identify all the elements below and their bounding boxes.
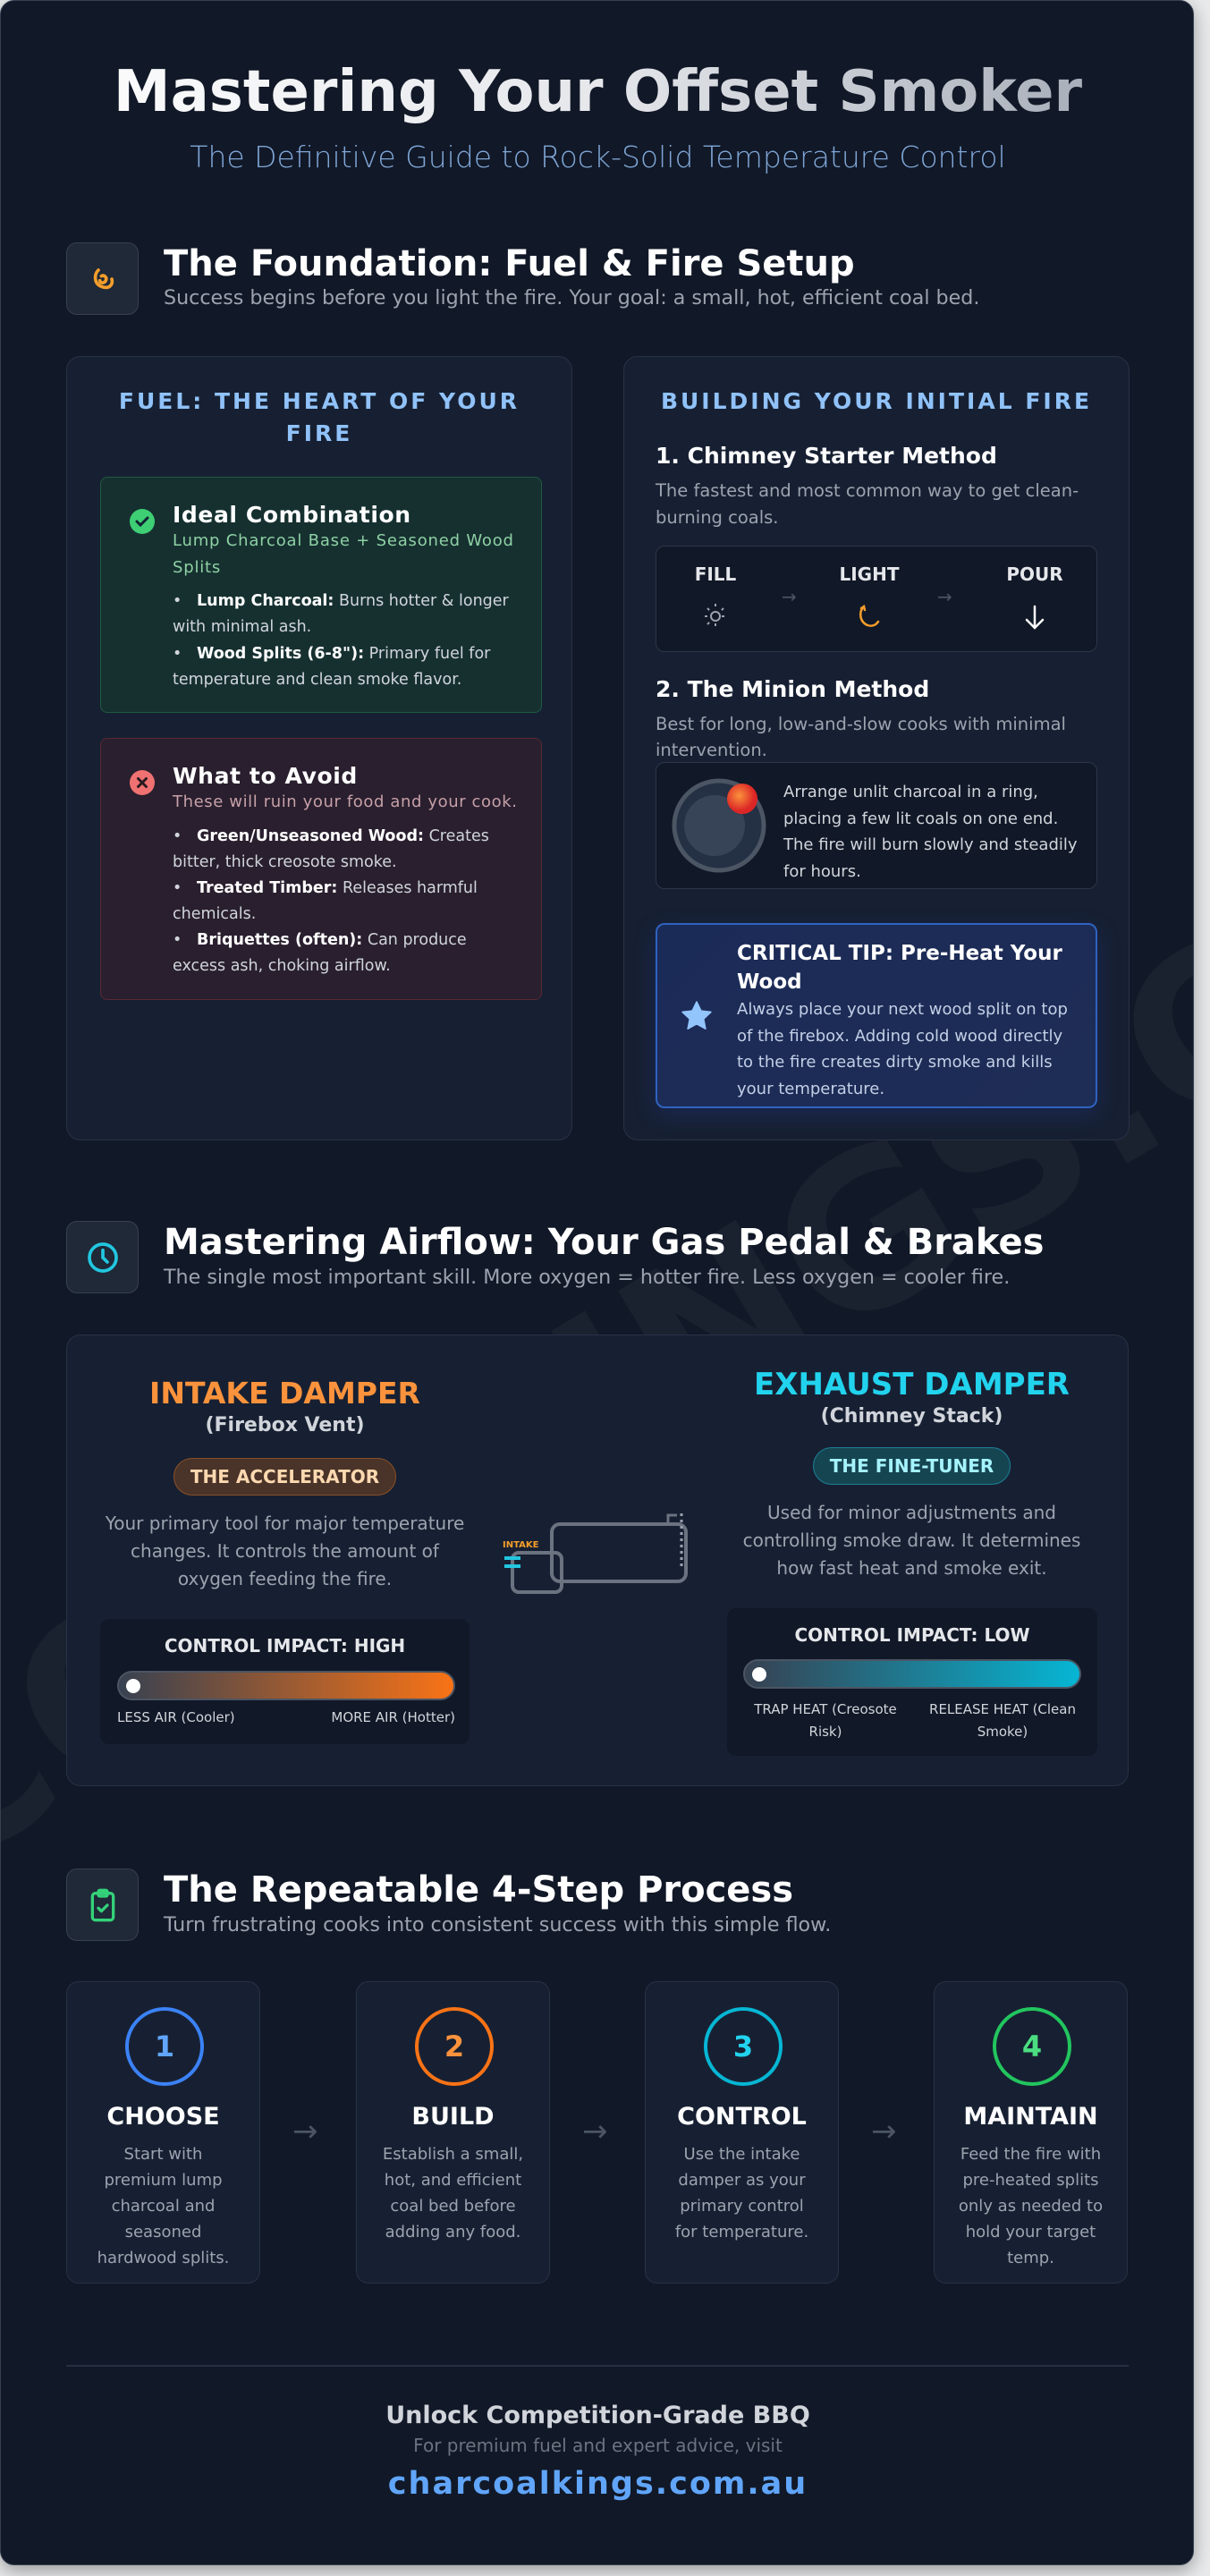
intake damper column: changes. It controls the amount of xyxy=(131,1540,439,1562)
step 2 xyxy=(356,1981,550,2284)
section heading: foundation: The Foundation: Fuel & Fire Setup xyxy=(164,243,855,284)
exhaust damper column: how fast heat and smoke exit. xyxy=(776,1557,1047,1579)
steps box: fill light pour xyxy=(656,546,1097,652)
subtitle: The Definitive Guide to Rock-Solid Temperature Control xyxy=(190,140,1006,174)
control impact low xyxy=(727,1608,1097,1756)
control impact low: CONTROL IMPACT: LOW xyxy=(794,1624,1030,1646)
exhaust damper column: (Chimney Stack) xyxy=(821,1405,1003,1428)
arrow 3: → xyxy=(871,2114,896,2149)
pill: accelerator xyxy=(173,1458,396,1496)
control impact low: Risk) xyxy=(809,1724,842,1740)
step 4: temp. xyxy=(1007,2249,1054,2267)
step 2: adding any food. xyxy=(385,2223,520,2241)
callout: critical tip: Always place your next wood split on top xyxy=(737,1000,1068,1019)
section subtitle: airflow: The single most important skill. More oxygen = hotter fire. Less oxygen = cooler fire. xyxy=(164,1266,1010,1289)
diagram: smoker xyxy=(503,1513,688,1594)
step 2: 2 xyxy=(444,2029,464,2063)
step 2: Establish a small, xyxy=(383,2145,523,2164)
icon: light xyxy=(859,605,880,627)
box: ideal combination: with minimal ash. xyxy=(173,618,311,636)
step 1: Start with xyxy=(124,2145,202,2164)
intake damper column: Your primary tool for major temperature xyxy=(106,1513,464,1534)
exhaust damper column xyxy=(743,1367,1080,1579)
box: what to avoid: • Green/Unseasoned Wood: Creates xyxy=(173,827,489,845)
icon: check xyxy=(130,509,155,534)
footer: For premium fuel and expert advice, visit xyxy=(413,2435,783,2456)
minion box: for hours. xyxy=(783,862,861,880)
callout: critical tip: Wood xyxy=(737,970,802,994)
minion box: Arrange unlit charcoal in a ring, xyxy=(783,783,1038,801)
arrow 2: → xyxy=(582,2114,608,2149)
control impact high xyxy=(100,1619,470,1744)
step 4: 4 xyxy=(1022,2029,1042,2063)
icon: clipboard xyxy=(66,1868,139,1941)
panel: building initial fire xyxy=(623,356,1130,1140)
control impact high: LESS AIR (Cooler) xyxy=(117,1709,235,1725)
box: ideal combination: Ideal Combination xyxy=(173,502,411,528)
intake damper column: INTAKE DAMPER xyxy=(149,1376,420,1411)
arrow 1: → xyxy=(292,2114,318,2149)
box: what to avoid: What to Avoid xyxy=(173,763,358,789)
step 4: hold your target xyxy=(966,2223,1096,2241)
box: ideal combination: temperature and clean smoke flavor. xyxy=(173,671,461,689)
step 3: CONTROL xyxy=(677,2103,807,2131)
step 4: pre-heated splits xyxy=(962,2171,1099,2190)
callout: critical tip: of the firebox. Adding cold wood directly xyxy=(737,1027,1062,1045)
steps box: fill light pour: → xyxy=(782,586,797,607)
icon: fill xyxy=(705,604,724,626)
exhaust damper column: EXHAUST DAMPER xyxy=(754,1367,1070,1402)
gauge high xyxy=(117,1671,455,1700)
step 3: primary control xyxy=(680,2197,804,2216)
section heading: airflow: Mastering Airflow: Your Gas Pedal & Brakes xyxy=(164,1222,1044,1263)
intake damper column: (Firebox Vent) xyxy=(205,1414,365,1436)
method 1 description: burning coals. xyxy=(656,507,778,528)
minion box: The fire will burn slowly and steadily xyxy=(783,835,1078,854)
icon: star xyxy=(681,1001,712,1030)
control impact low: TRAP HEAT (Creosote xyxy=(754,1701,897,1717)
box: what to avoid: • Treated Timber: Releases harmful xyxy=(173,879,478,897)
icon: minion ring xyxy=(673,778,766,873)
steps box: fill light pour: → xyxy=(937,586,952,607)
footer: Unlock Competition-Grade BBQ xyxy=(385,2402,810,2429)
control impact low: RELEASE HEAT (Clean xyxy=(929,1701,1076,1717)
callout: critical tip: your temperature. xyxy=(737,1079,884,1098)
icon: flame xyxy=(66,242,139,315)
diagram: smoker: INTAKE xyxy=(503,1540,539,1550)
step 1: CHOOSE xyxy=(106,2103,220,2131)
panel heading: fuel xyxy=(119,388,520,446)
intake damper column xyxy=(106,1376,464,1589)
step 3: for temperature. xyxy=(675,2223,808,2241)
panel heading: fuel: FIRE xyxy=(286,420,352,446)
control impact low: Smoke) xyxy=(977,1724,1028,1740)
box: what to avoid xyxy=(100,738,542,1000)
step 2: hot, and efficient xyxy=(385,2171,521,2190)
step 1: hardwood splits. xyxy=(97,2249,229,2267)
step 2: coal bed before xyxy=(390,2197,516,2216)
panel heading: building: BUILDING YOUR INITIAL FIRE xyxy=(661,388,1092,414)
method 2 description: intervention. xyxy=(656,740,767,760)
intake damper column: oxygen feeding the fire. xyxy=(178,1568,392,1589)
step 3 xyxy=(645,1981,839,2284)
gauge low xyxy=(743,1659,1081,1689)
box: what to avoid: chemicals. xyxy=(173,905,256,923)
method 2 heading: 2. The Minion Method xyxy=(656,676,929,702)
step 2: BUILD xyxy=(411,2103,495,2131)
footer xyxy=(385,2402,810,2502)
step 4: only as needed to xyxy=(959,2197,1103,2216)
callout: critical tip xyxy=(656,923,1097,1108)
section heading: process: The Repeatable 4-Step Process xyxy=(164,1869,793,1911)
panel: fuel xyxy=(66,356,572,1140)
step 1: 1 xyxy=(155,2029,174,2063)
box: what to avoid: bitter, thick creosote smoke. xyxy=(173,853,397,871)
box: what to avoid: • Briquettes (often): Can produce xyxy=(173,931,467,949)
section subtitle: process: Turn frustrating cooks into consistent success with this simple flow. xyxy=(164,1913,831,1936)
step 4: MAINTAIN xyxy=(963,2103,1098,2131)
panel: airflow xyxy=(66,1335,1129,1786)
section subtitle: foundation: Success begins before you light the fire. Your goal: a small, hot, efficient coal bed. xyxy=(164,286,979,309)
method 2 description xyxy=(656,714,1066,760)
pill: fine-tuner: THE FINE-TUNER xyxy=(830,1455,994,1477)
method 1 description xyxy=(655,480,1079,528)
control impact high: MORE AIR (Hotter) xyxy=(331,1709,455,1725)
minion box xyxy=(656,762,1097,889)
step 4: Feed the fire with xyxy=(960,2145,1101,2164)
exhaust damper column: Used for minor adjustments and xyxy=(767,1502,1056,1523)
pill: fine-tuner xyxy=(813,1447,1011,1485)
box: what to avoid: excess ash, choking airflow. xyxy=(173,957,391,975)
step 4 xyxy=(934,1981,1128,2284)
box: ideal combination: • Lump Charcoal: Burns hotter & longer xyxy=(173,592,509,610)
panel heading: fuel: FUEL: THE HEART OF YOUR xyxy=(119,388,520,414)
step 1: seasoned xyxy=(125,2223,201,2241)
steps box: fill light pour: POUR xyxy=(1006,564,1063,585)
callout: critical tip: to the fire creates dirty smoke and kills xyxy=(737,1053,1053,1072)
box: what to avoid: These will ruin your food and your cook. xyxy=(173,792,518,811)
exhaust damper column: controlling smoke draw. It determines xyxy=(743,1530,1080,1551)
box: ideal combination xyxy=(100,477,542,713)
method 1 heading: 1. Chimney Starter Method xyxy=(656,443,997,469)
control impact high: CONTROL IMPACT: HIGH xyxy=(165,1635,405,1657)
box: ideal combination: • Wood Splits (6-8"): Primary fuel for xyxy=(173,645,490,663)
step 3: 3 xyxy=(733,2029,753,2063)
icon: pour arrow xyxy=(1025,605,1045,630)
method 2 description: Best for long, low-and-slow cooks with minimal xyxy=(656,714,1066,734)
footer: charcoalkings.com.au xyxy=(388,2466,808,2502)
step 1 xyxy=(66,1981,260,2284)
box: ideal combination: Lump Charcoal Base + Seasoned Wood xyxy=(173,531,514,550)
step 1: premium lump xyxy=(104,2171,223,2190)
pill: accelerator: THE ACCELERATOR xyxy=(190,1466,379,1487)
minion box: placing a few lit coals on one end. xyxy=(783,809,1058,828)
step 1: charcoal and xyxy=(112,2197,215,2216)
icon: clock xyxy=(66,1221,139,1293)
steps box: fill light pour: LIGHT xyxy=(839,564,899,585)
step 3: Use the intake xyxy=(684,2145,800,2164)
step 3: damper as your xyxy=(678,2171,806,2190)
title: Mastering Your Offset Smoker xyxy=(114,59,1082,125)
steps box: fill light pour: FILL xyxy=(695,564,736,585)
icon: x xyxy=(130,770,155,795)
method 1 description: The fastest and most common way to get clean- xyxy=(656,480,1079,501)
callout: critical tip: CRITICAL TIP: Pre-Heat Your xyxy=(737,942,1062,965)
box: ideal combination: Splits xyxy=(173,558,221,577)
